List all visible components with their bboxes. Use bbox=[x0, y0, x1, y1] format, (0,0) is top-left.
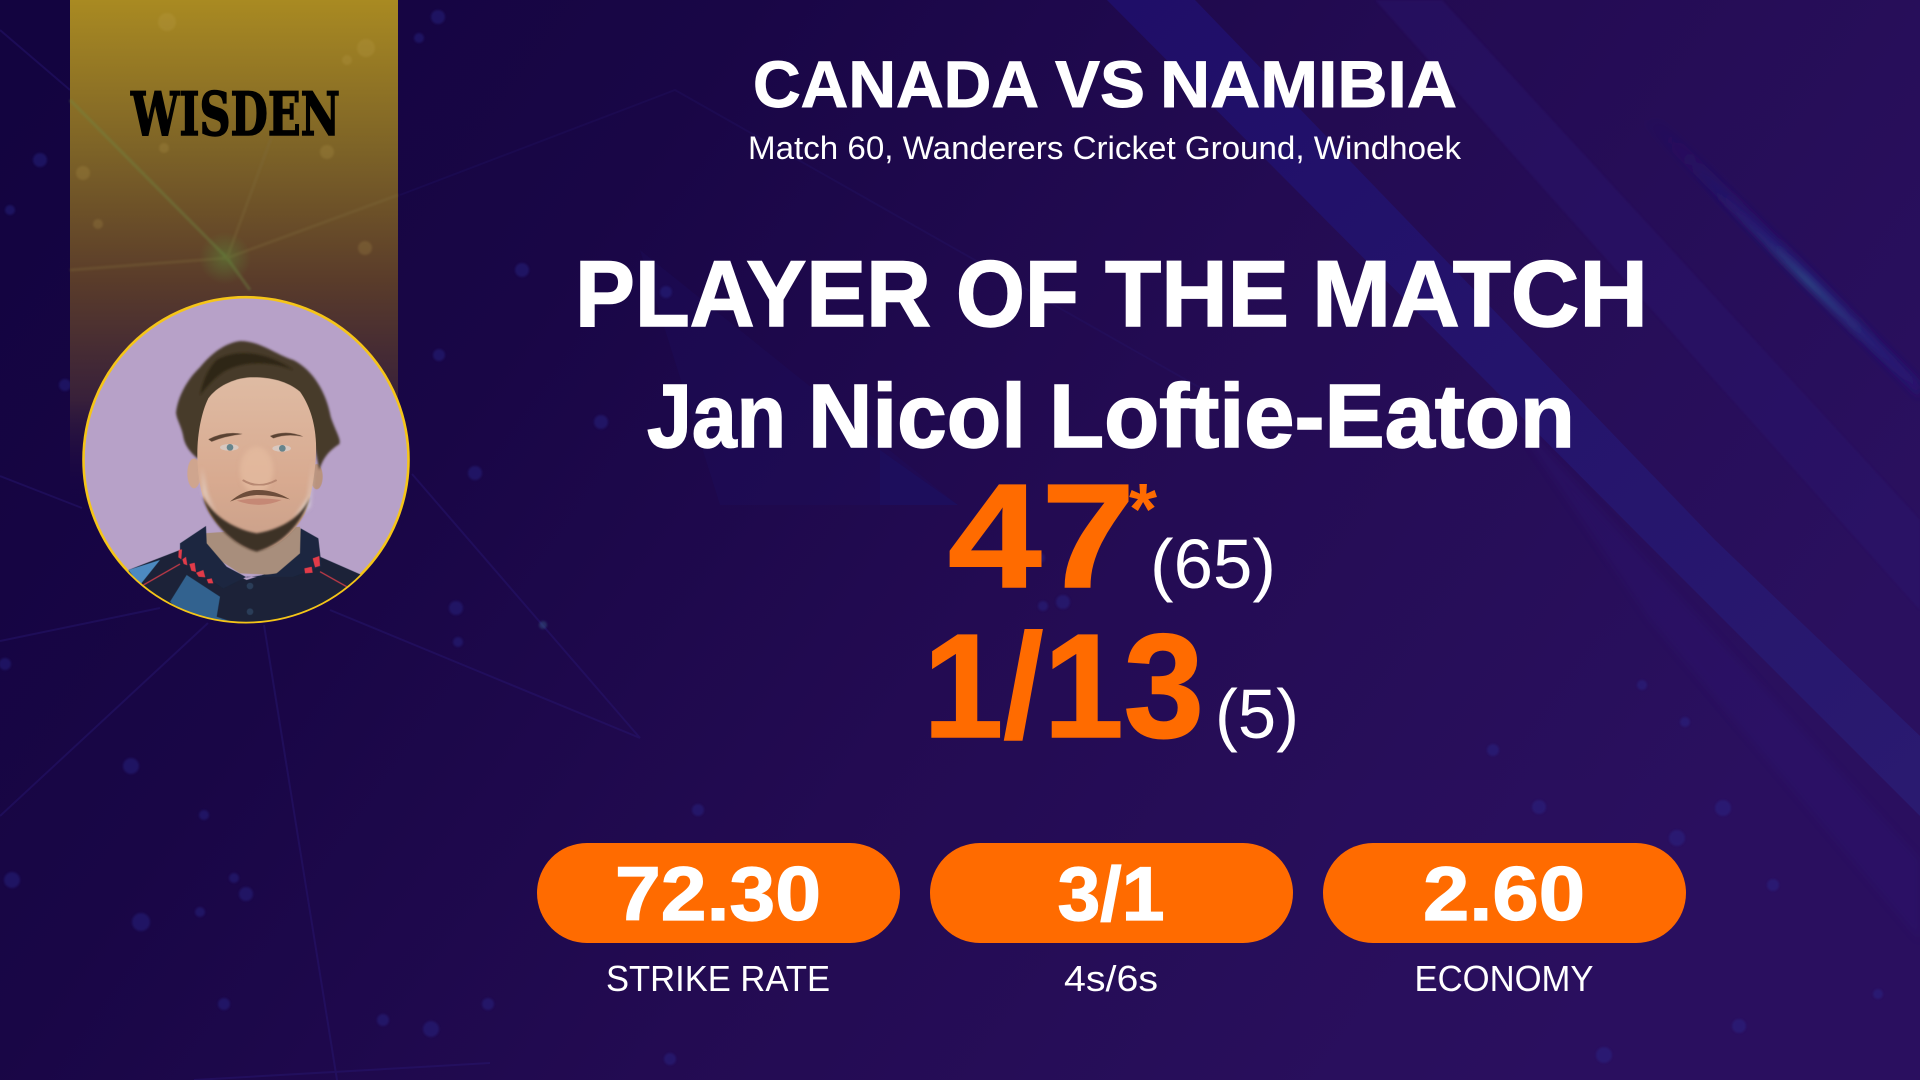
batting score: * bbox=[1129, 470, 1157, 550]
gold panel bbox=[70, 0, 398, 500]
face bbox=[197, 377, 316, 551]
heading: PLAYER bbox=[575, 241, 931, 346]
bowling figures: (5) bbox=[1215, 675, 1299, 753]
heading: THE bbox=[1105, 241, 1289, 346]
beard bbox=[203, 497, 310, 552]
neck bbox=[203, 527, 305, 575]
ears bbox=[187, 458, 201, 488]
eyes bbox=[220, 444, 239, 451]
nose and mouth bbox=[243, 480, 277, 485]
hair bbox=[176, 341, 340, 470]
stat: fours and sixes: 3/1 bbox=[1058, 852, 1164, 937]
jersey shoulders bbox=[128, 550, 360, 622]
player name bbox=[647, 367, 1575, 467]
stat: economy: 2.60 bbox=[1423, 852, 1585, 937]
heading bbox=[575, 241, 1648, 346]
match title: NAMIBIA bbox=[1160, 47, 1457, 121]
heading: MATCH bbox=[1312, 241, 1648, 346]
match title: VS bbox=[1055, 47, 1145, 121]
logo: Wisden: WISDEN bbox=[130, 80, 340, 150]
batting score: 47 bbox=[948, 454, 1135, 619]
player name: Nicol bbox=[808, 367, 1026, 467]
brows bbox=[208, 433, 303, 442]
match title: CANADA bbox=[753, 47, 1039, 121]
stat: economy: ECONOMY bbox=[1414, 958, 1594, 999]
stat: strike rate bbox=[537, 843, 900, 999]
stat: strike rate: 72.30 bbox=[615, 852, 821, 937]
heading: OF bbox=[956, 241, 1079, 346]
batting score bbox=[948, 454, 1276, 619]
bowling figures: 1/13 bbox=[923, 604, 1204, 769]
hair shadow bbox=[200, 353, 293, 395]
batting score: (65) bbox=[1150, 525, 1276, 603]
player name: Jan bbox=[647, 367, 786, 467]
match subtitle: Match 60, Wanderers Cricket Ground, Windhoek bbox=[748, 130, 1462, 166]
stat: economy bbox=[1323, 843, 1686, 999]
stat: fours and sixes: 4s/6s bbox=[1064, 958, 1158, 999]
player name: Loftie-Eaton bbox=[1049, 367, 1575, 467]
stat: fours and sixes bbox=[930, 843, 1293, 999]
stat: strike rate: STRIKE RATE bbox=[606, 958, 830, 999]
player portrait bbox=[84, 297, 408, 633]
match title bbox=[753, 47, 1457, 121]
collar bbox=[180, 526, 321, 578]
cheek highlights bbox=[202, 447, 313, 520]
